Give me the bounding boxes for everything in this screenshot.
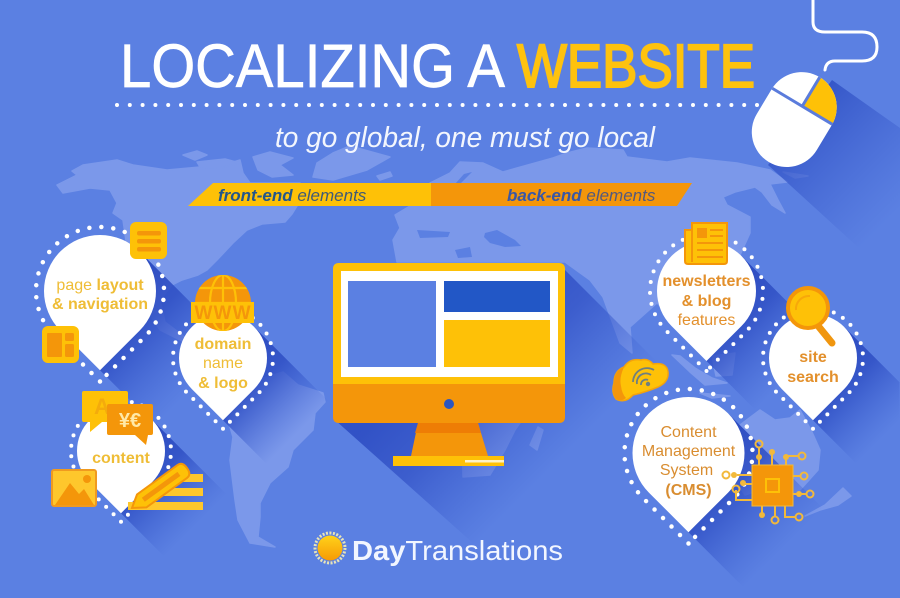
pin body — [632, 397, 744, 532]
pin: content — [71, 401, 227, 557]
icon: magnifier — [788, 288, 832, 343]
icon: pencil and lines — [127, 462, 203, 514]
logo sun — [315, 533, 345, 563]
icon: page layout — [42, 326, 79, 363]
pin label: & blog — [682, 293, 731, 310]
pin label: (CMS) — [665, 482, 712, 499]
pin: site search — [763, 308, 899, 464]
pin shadow — [813, 327, 899, 464]
icon: menu lines — [130, 222, 167, 259]
icon: translation bubbles — [82, 391, 153, 445]
logo wordmark: DayTranslations — [352, 535, 563, 566]
icon: translation bubbles: A — [94, 394, 110, 419]
pin label: newsletters — [662, 273, 751, 290]
pin label: features — [678, 312, 735, 329]
pin shadow — [121, 420, 227, 557]
pin body — [44, 235, 156, 370]
mouse cable — [813, 0, 877, 70]
pin label: domain — [195, 336, 251, 353]
pin label: & navigation — [52, 296, 148, 313]
subtitle: to go global, one must go local — [275, 122, 656, 154]
pin dotted outline — [763, 308, 863, 429]
banner: back-end segment — [431, 183, 692, 206]
pin dotted outline — [650, 235, 763, 371]
back-end label: back-end elements — [507, 186, 656, 205]
pin label: Content — [660, 424, 717, 441]
mouse with cable — [752, 0, 878, 167]
mouse body — [752, 72, 837, 167]
monitor frame — [333, 263, 565, 384]
monitor stand — [411, 423, 488, 456]
pin dotted outline — [624, 389, 752, 544]
monitor long shadow — [335, 270, 700, 585]
banner: front-end and back-end — [188, 183, 692, 206]
logo: Day Translations — [315, 533, 563, 566]
icon: picture — [52, 470, 96, 506]
pin shadow — [100, 251, 235, 426]
pin label: System — [660, 462, 713, 479]
pin label: site — [799, 349, 827, 366]
pin label: name — [203, 355, 243, 372]
title: LOCALIZING A — [120, 32, 505, 100]
pin shadow — [688, 413, 823, 588]
icon: www globe: WWW — [194, 303, 251, 324]
pin shadow — [223, 327, 329, 464]
icon: wifi cloud — [613, 360, 668, 401]
pin label: page layout — [56, 277, 144, 294]
icon: circuit chip — [722, 440, 814, 524]
title — [120, 32, 755, 100]
monitor button — [444, 399, 454, 409]
monitor — [333, 263, 565, 466]
monitor screen — [341, 271, 558, 377]
pin: content management system — [624, 389, 823, 588]
pin label: search — [787, 369, 839, 386]
pin label: content — [92, 450, 151, 467]
pin shadow — [706, 256, 825, 410]
icon: newspaper — [685, 223, 727, 264]
pin body — [77, 407, 165, 513]
pin dotted outline — [71, 401, 171, 522]
pin body — [657, 241, 756, 361]
front-end label: front-end elements — [218, 186, 367, 205]
icon: translation bubbles: ¥€ — [119, 410, 141, 432]
pin: domain name and logo — [173, 308, 329, 464]
sea shapes on map — [417, 172, 521, 258]
mouse shadow — [768, 80, 900, 249]
pin: newsletters and blog features — [650, 235, 825, 410]
pin dotted outline — [173, 308, 273, 429]
title: WEBSITE — [517, 32, 755, 100]
pin body — [179, 314, 267, 420]
world map — [57, 146, 851, 547]
banner: front-end segment — [188, 183, 431, 206]
pin label: & logo — [198, 375, 248, 392]
dotted divider — [117, 103, 766, 107]
pin label: Management — [642, 443, 736, 460]
pin dotted outline — [36, 227, 164, 382]
pin body — [769, 314, 857, 420]
pin: page layout and navigation — [36, 227, 235, 426]
icon: www globe — [191, 275, 254, 331]
